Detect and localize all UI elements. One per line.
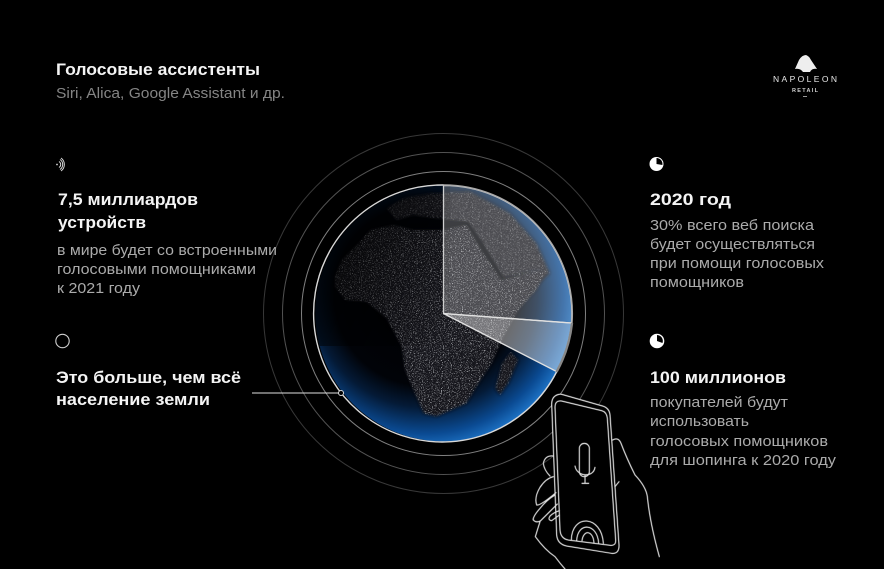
- continents: night lights of Africa, Europe and Arabia: [315, 186, 550, 417]
- text block: 7,5 billion devices: голосовыми помощниками: [57, 261, 256, 278]
- pie wedge: 100 million: [444, 314, 572, 372]
- text block: 2020: будет осуществляться: [650, 236, 815, 253]
- logo: Napoleon Retail: RETAIL: [792, 88, 819, 94]
- icon: circle: [56, 334, 69, 348]
- text block: 2020: при помощи голосовых: [650, 255, 825, 272]
- text block: 100 million: использовать: [650, 413, 749, 430]
- globe outline: [314, 185, 572, 442]
- globe: [315, 186, 572, 442]
- phone screen: [555, 401, 616, 545]
- text block: 100 million: для шопинга к 2020 году: [650, 452, 837, 469]
- text block: 100 million: [650, 368, 837, 469]
- sound arcs: [571, 521, 603, 543]
- fingers and palm: [533, 456, 565, 569]
- illustration: hand holding phone: [533, 394, 659, 569]
- logo: Napoleon Retail: [773, 55, 837, 97]
- title: Siri, Alica, Google Assistant и др.: [56, 85, 285, 102]
- text block: more than world population: Это больше, чем всё: [56, 368, 241, 387]
- text block: 2020: 30% всего веб поиска: [650, 217, 815, 234]
- microphone: [579, 443, 589, 477]
- pie wedge: 30 percent: [444, 185, 572, 323]
- text block: 7,5 billion devices: [57, 190, 277, 297]
- title: Голосовые ассистенты: [56, 60, 260, 79]
- phone body: [552, 394, 619, 553]
- right side of hand: [613, 439, 659, 557]
- text block: 7,5 billion devices: к 2021 году: [57, 280, 141, 297]
- concentric rings: [264, 134, 624, 494]
- callout line to globe: [252, 390, 344, 396]
- text block: 7,5 billion devices: 7,5 миллиардов: [58, 190, 198, 209]
- icon: sound waves: [56, 158, 64, 171]
- text block: more than world population: население земли: [56, 390, 210, 409]
- logo: Napoleon Retail: NAPOLEON: [773, 74, 837, 84]
- text block: 2020: 2020 год: [650, 190, 731, 209]
- text block: 7,5 billion devices: устройств: [58, 213, 146, 232]
- text block: more than world population: [56, 368, 241, 409]
- text block: 100 million: 100 миллионов: [650, 368, 786, 387]
- text block: 2020: [650, 190, 825, 291]
- text block: 7,5 billion devices: в мире будет со встроенными: [57, 242, 277, 259]
- icon: pie 100 million: [650, 334, 664, 348]
- icon: pie 2020: [650, 157, 664, 171]
- title: [56, 60, 285, 102]
- text block: 100 million: голосовых помощников: [650, 433, 828, 450]
- text block: 100 million: покупателей будут: [650, 394, 788, 411]
- text block: 2020: помощников: [650, 274, 744, 291]
